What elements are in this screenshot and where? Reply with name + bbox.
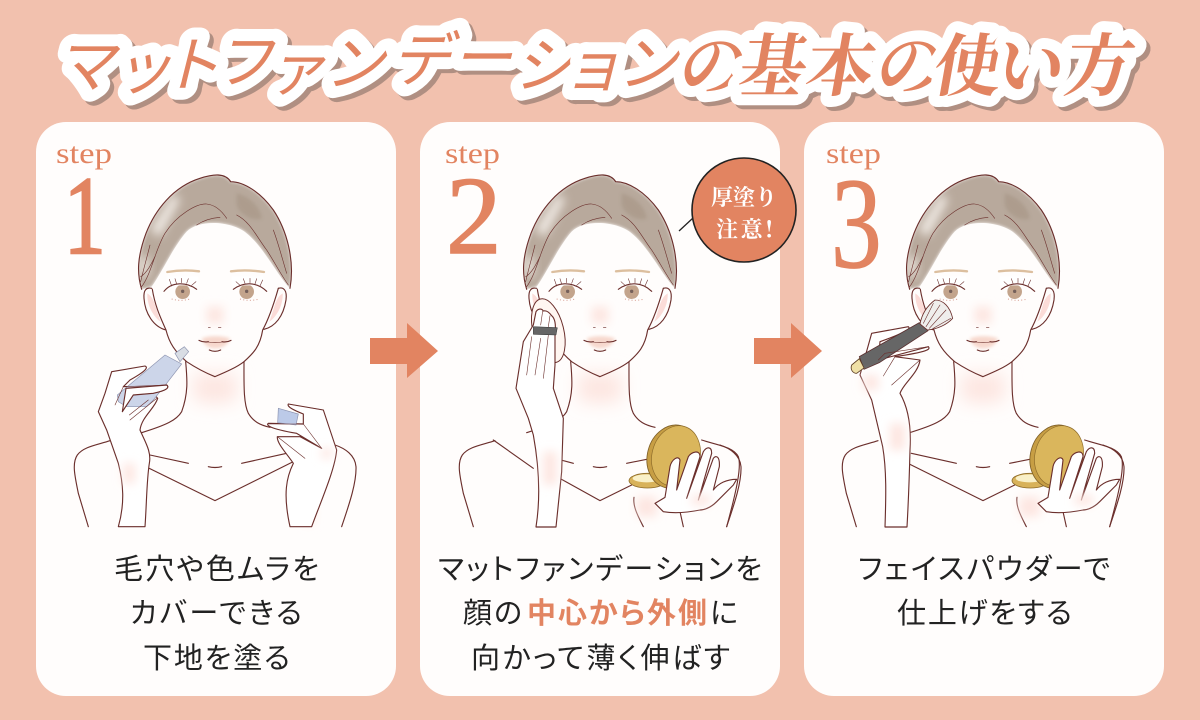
arrow: step 1 to 2 xyxy=(370,323,438,378)
hands, tube and cap xyxy=(98,347,337,527)
title xyxy=(51,12,1144,110)
caption: に xyxy=(710,598,738,630)
card xyxy=(36,122,396,696)
callout: thick-coating warning: 厚塗り xyxy=(711,181,777,212)
caption: 下地を塗る xyxy=(143,642,290,675)
card xyxy=(420,122,780,696)
caption xyxy=(858,553,1110,630)
callout: thick-coating warning: 注意! xyxy=(716,213,773,244)
arrow: step 2 to 3 xyxy=(754,323,822,378)
step number: 3 xyxy=(831,152,882,296)
panel: step 3 xyxy=(804,122,1164,696)
step label: step xyxy=(445,137,500,170)
card xyxy=(804,122,1164,696)
illustration: woman xyxy=(842,175,1124,527)
step label: step xyxy=(826,137,881,170)
title: kanji and kana: の基本の使い方 xyxy=(673,12,1144,110)
panel: step 1 xyxy=(36,122,396,696)
caption: マットファンデーションを xyxy=(438,553,762,586)
caption: 向かって薄く伸ばす xyxy=(471,642,730,675)
illustration: woman with puff xyxy=(459,175,741,527)
compact and hand xyxy=(629,419,739,527)
step label: step xyxy=(56,137,112,170)
compact and hand xyxy=(1012,419,1122,527)
brush and hand xyxy=(851,300,953,527)
caption: 中心から外側 xyxy=(527,597,707,630)
caption: 仕上げをする xyxy=(897,597,1072,630)
step number: 1 xyxy=(64,156,106,278)
panel: step 2 xyxy=(420,122,796,696)
puff and raised hand xyxy=(516,295,571,527)
callout: thick-coating warning xyxy=(679,158,796,262)
caption: 毛穴や色ムラを xyxy=(114,553,319,586)
caption xyxy=(114,553,319,675)
caption: フェイスパウダーで xyxy=(858,553,1110,586)
step number: 2 xyxy=(446,155,502,278)
caption: カバーできる xyxy=(130,598,302,630)
caption xyxy=(438,553,762,675)
title: katakana: マットファンデーション xyxy=(51,25,692,103)
illustration: woman with primer tube and cap xyxy=(74,175,356,527)
caption: 顔の xyxy=(463,597,522,630)
